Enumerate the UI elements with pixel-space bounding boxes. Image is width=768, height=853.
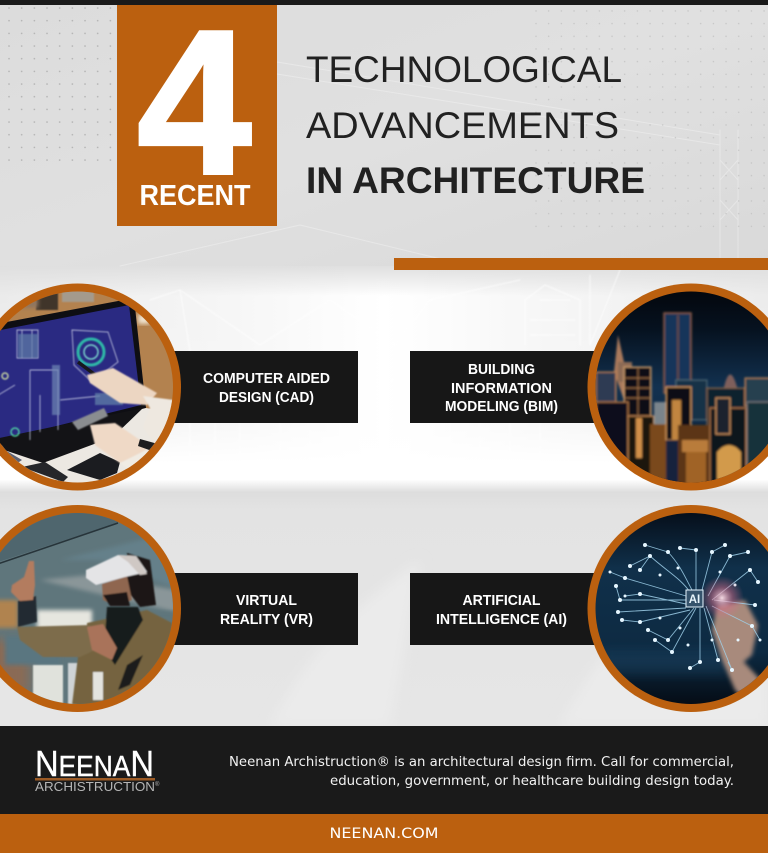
label: computer aided design: DESIGN (CAD) [219,390,314,406]
label: artificial intelligence [410,573,600,645]
title [306,48,645,201]
logo: Neenan Archistruction: ARCHISTRUCTION [35,780,155,794]
upper hand [87,368,157,405]
crane and wireframe background lines [120,62,738,462]
website strip [0,814,768,853]
dot pattern: top left [6,6,114,162]
title: TECHNOLOGICAL [306,48,622,90]
wrist and hand [18,596,37,627]
footer description: Neenan Archistruction® is an architectural design firm. Call for commercial, [229,754,734,770]
photo circle: BIM city model [588,284,768,498]
top bar [0,0,768,5]
label: virtual reality: VIRTUAL [236,593,297,609]
label: building information modeling: INFORMATION [451,381,552,397]
label: building information modeling: MODELING (BIM) [445,399,558,415]
footer panel [0,726,768,814]
photo circle: CAD workstation [0,284,181,490]
footer description: education, government, or healthcare building design today. [330,773,734,789]
headset [86,555,147,585]
orange number badge [117,0,277,226]
label: artificial intelligence: ARTIFICIAL [462,593,541,609]
website strip: NEENAN.COM [330,826,438,842]
label: artificial intelligence: INTELLIGENCE (AI) [436,612,567,628]
hair and face [127,553,156,607]
AI chip [686,590,703,607]
title: ADVANCEMENTS [306,104,619,146]
orange divider bar [394,258,768,270]
label: building information modeling [410,351,600,423]
label: recent: RECENT [140,180,251,212]
photo circle: AI circuit brain [588,505,768,730]
dot pattern: top right [533,8,768,233]
AI chip: AI [689,594,700,606]
logo: Neenan Archistruction: ® [155,781,160,788]
footer description [229,754,734,789]
gesturing hand [87,624,117,660]
title: IN ARCHITECTURE [306,159,645,201]
label: computer aided design [170,351,358,423]
blazer [72,610,172,705]
logo: Neenan Archistruction: NEENAN [35,743,154,784]
label: virtual reality: REALITY (VR) [220,612,313,628]
label: virtual reality [170,573,358,645]
lower hand [90,423,147,463]
label: computer aided design: COMPUTER AIDED [203,371,330,387]
photo circle: person wearing VR headset [0,505,181,715]
label: building information modeling: BUILDING [468,362,535,378]
